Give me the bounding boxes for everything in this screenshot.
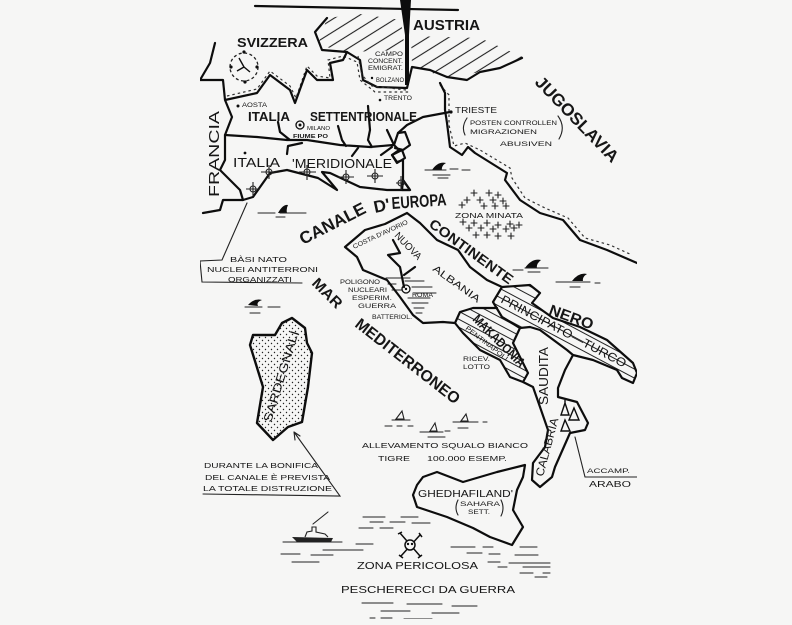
label: Ghedhafiland: SETT. bbox=[468, 509, 490, 516]
label: Austria: AUSTRIA bbox=[413, 17, 480, 34]
northern frontier of Italy bbox=[315, 18, 522, 88]
label: Canale d'Europa: D' bbox=[372, 195, 392, 217]
label: Makadonia: MAKADONIA bbox=[470, 312, 529, 371]
callout: Accamp. Arabo bbox=[575, 437, 637, 489]
label: Aosta: AOSTA bbox=[242, 102, 268, 109]
eastern Adriatic coast bbox=[440, 83, 637, 263]
label: nuclear and bacteriological test range: GUERRA bbox=[358, 304, 396, 310]
label: white shark farming: 100.000 ESEMP. bbox=[427, 454, 507, 463]
top frontier line and black wedge bbox=[255, 0, 458, 85]
callout: Accamp. Arabo: ARABO bbox=[589, 480, 631, 489]
minefield with label bbox=[455, 190, 523, 239]
label: Zona Pericolosa: ZONA PERICOLOSA bbox=[357, 560, 478, 572]
Italian peninsula outline bbox=[345, 213, 637, 487]
label: Pescherecci da guerra: PESCHERECCI DA GUERRA bbox=[341, 584, 515, 596]
Sicily island bbox=[413, 465, 525, 545]
river Tiber bbox=[388, 240, 415, 287]
Trieste migration note: POSTEN CONTROLLEN bbox=[470, 120, 557, 127]
label: Ricev. Lotto: RICEV. bbox=[463, 356, 490, 363]
label: Ghedhafiland: SAHARA bbox=[460, 501, 501, 508]
label: Aosta bbox=[236, 102, 268, 109]
concentration camp label bbox=[358, 51, 406, 90]
label: Ghedhafiland bbox=[418, 488, 513, 516]
label: Mar Mediterraneo: MAR bbox=[308, 275, 346, 312]
concentration camp label: BOLZANO bbox=[376, 77, 404, 84]
icon: clock in Switzerland bbox=[229, 50, 259, 84]
label: Mar Mediterraneo: MEDITERRONEO bbox=[352, 316, 463, 408]
river Po and tributaries bbox=[225, 106, 394, 156]
Trieste migration note: ABUSIVEN bbox=[500, 141, 552, 148]
label: Ghedhafiland: GHEDHAFILAND' bbox=[418, 488, 513, 500]
label: nuclear and bacteriological test range: ESPERIM. bbox=[352, 296, 392, 302]
Trieste migration note: MIGRAZIONEN bbox=[470, 129, 537, 136]
icon: warship bbox=[292, 512, 333, 542]
label: Italia Settentrionale: SETTENTRIONALE bbox=[310, 110, 417, 124]
label: Saudita: SAUDITA bbox=[537, 346, 551, 405]
Trieste migration note: TRIESTE bbox=[455, 106, 497, 115]
hatched Makadonia bbox=[455, 308, 528, 382]
label: Canale d'Europa bbox=[296, 190, 447, 249]
callout: canal reclamation note: LA TOTALE DISTRUZIONE bbox=[203, 484, 332, 493]
label: Ricev. Lotto bbox=[463, 356, 490, 371]
callout: canal reclamation note: DURANTE LA BONIFICA bbox=[204, 461, 318, 470]
label: Canale d'Europa: EUROPA bbox=[391, 190, 447, 213]
label: Nero: NERO bbox=[547, 302, 596, 334]
concentration camp label: EMIGRAT. bbox=[368, 65, 403, 72]
callout: NATO bases bbox=[200, 203, 318, 284]
label: nuclear and bacteriological test range: NUCLEARI bbox=[348, 288, 387, 294]
hatched Principato Turco bbox=[493, 285, 637, 383]
label: Nuova Albania: NUOVA bbox=[392, 230, 424, 263]
hatched Austria bbox=[318, 14, 525, 78]
label: Italia Meridionale: ITALIA bbox=[233, 156, 281, 170]
label: Svizzera: SVIZZERA bbox=[237, 35, 309, 50]
label: Milano and river Po: MILANO bbox=[307, 126, 331, 132]
label: Roma: ROMA bbox=[412, 293, 433, 299]
icons: NATO bases bbox=[246, 165, 406, 196]
label: Ricev. Lotto: LOTTO bbox=[463, 364, 490, 371]
sea wave lines bbox=[281, 517, 550, 619]
label: Sardegna: SARDEGNALI bbox=[260, 329, 302, 424]
callout: canal reclamation note bbox=[203, 432, 340, 496]
label: Jugoslavia: JUGOSLAVIA bbox=[531, 73, 623, 166]
label: nuclear and bacteriological test range: BATTERIOL. bbox=[372, 315, 412, 321]
Sardinia island bbox=[250, 318, 312, 440]
Venetian lagoon bbox=[392, 132, 410, 190]
icon: sharks in the sea bbox=[245, 163, 600, 437]
concentration camp label: CONCENT. bbox=[368, 58, 403, 65]
label: Mar Mediterraneo bbox=[308, 275, 463, 408]
callout: canal reclamation note: DEL CANALE È PREVISTA bbox=[205, 473, 330, 482]
concentration camp label: CAMPO bbox=[375, 51, 403, 58]
dashed Alpine frontier bbox=[227, 56, 632, 255]
icon: Rome circle bbox=[402, 285, 410, 293]
callout: NATO bases: BÀSI NATO bbox=[230, 255, 287, 264]
label: nuclear and bacteriological test range bbox=[340, 280, 412, 321]
label: Trento: TRENTO bbox=[384, 95, 412, 102]
northern Adriatic and Ligurian coast bbox=[203, 112, 450, 213]
label: white shark farming: ALLEVAMENTO SQUALO BIANCO bbox=[362, 441, 528, 450]
label: Principato Turco: PRINCIPATO—TURCO bbox=[499, 292, 629, 370]
label: Francia: FRANCIA bbox=[206, 111, 223, 197]
hatched Roma area bbox=[386, 278, 436, 313]
label: Italia Settentrionale bbox=[248, 110, 417, 124]
icons: Arab camp tents bbox=[561, 400, 579, 431]
label: Pentinapoli: PENTINAPOLI bbox=[464, 325, 509, 363]
label: Italia Settentrionale: ITALIA bbox=[248, 110, 290, 124]
label: Milano and river Po: FIUME PO bbox=[293, 134, 329, 140]
label: Continente: CONTINENTE bbox=[426, 215, 517, 287]
label: white shark farming bbox=[362, 441, 528, 463]
label: Calabria: CALABRIA bbox=[534, 416, 562, 478]
label: Italia Meridionale: 'MERIDIONALE bbox=[292, 157, 392, 171]
label: Milano and river Po bbox=[293, 121, 331, 140]
callout: NATO bases: NUCLEI ANTITERRONI bbox=[207, 265, 318, 274]
label: Canale d'Europa: CANALE bbox=[296, 199, 369, 249]
minefield with label: ZONA MINATA bbox=[455, 211, 523, 220]
Trieste migration note bbox=[449, 106, 562, 148]
label: Nuova Albania: ALBANIA bbox=[430, 264, 482, 306]
western border with France and Switzerland bbox=[200, 43, 347, 200]
label: Costa d'Avorio: COSTA D'AVORIO bbox=[352, 219, 409, 251]
label: Italia Meridionale bbox=[233, 152, 392, 171]
label: nuclear and bacteriological test range: POLIGONO bbox=[340, 280, 380, 286]
callout: Accamp. Arabo: ACCAMP. bbox=[587, 468, 630, 475]
icon: skull and crossbones bbox=[398, 532, 422, 558]
callout: NATO bases: ORGANIZZATI bbox=[228, 275, 292, 284]
label: Nuova Albania bbox=[392, 230, 482, 306]
label: white shark farming: TIGRE bbox=[378, 454, 410, 463]
